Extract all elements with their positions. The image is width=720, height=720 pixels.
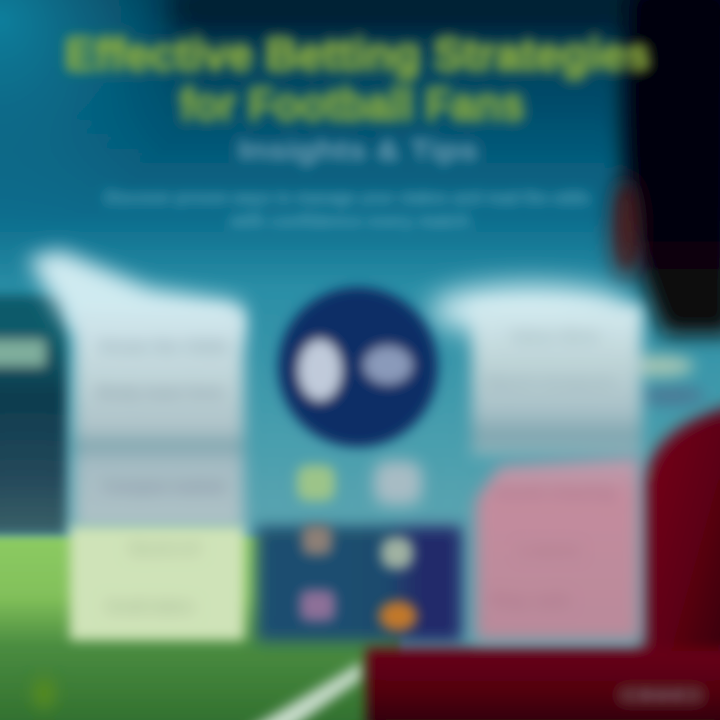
shirt shoulder: [644, 405, 720, 720]
panel: left info card: [74, 310, 244, 528]
right card text: [485, 327, 615, 392]
intro text: with confidence every match: [229, 211, 470, 232]
card text: Know the Odds: [100, 337, 230, 356]
panel: right info card: [472, 305, 642, 455]
green card text: Bankroll: [130, 539, 200, 558]
green card text: Small stakes: [105, 597, 195, 616]
green card text: [105, 539, 200, 616]
panel: right pink card: [476, 456, 640, 640]
pink card text: Avoid chasing: [495, 483, 615, 502]
card text: Study team form: [95, 383, 225, 402]
icon: orange tile: [379, 601, 417, 631]
person: face edge: [612, 178, 640, 278]
pink card text: Limits: [520, 541, 580, 560]
person: glow at neck: [626, 355, 694, 377]
person: red shirt: [366, 405, 720, 720]
icon: grey-green tile: [381, 537, 413, 569]
pink card body: [476, 456, 640, 640]
background: sky glow top left: [0, 0, 225, 235]
icon: green tile: [297, 465, 335, 501]
background: left stadium stand: [0, 295, 67, 535]
pink card text: [490, 483, 615, 610]
title: [65, 28, 651, 130]
panel: left green card: [70, 526, 244, 640]
card text: [95, 337, 230, 496]
panel: navy behind centre icons: [256, 526, 462, 642]
footer mark: [618, 686, 704, 704]
right card text: Value Bets: [510, 327, 600, 346]
background: dark sky band: [170, 0, 630, 30]
footer chip: [618, 686, 704, 704]
title: Effective Betting Strategies: [65, 28, 651, 80]
footer text: Brand: [641, 687, 681, 704]
pink card text: Play safe: [490, 591, 570, 610]
background: clouds left: [28, 250, 240, 340]
person: shadow by shoulder: [638, 386, 706, 406]
icon: small logo bottom left: [32, 677, 56, 709]
background: clouds right: [430, 284, 630, 336]
intro text: [104, 188, 590, 232]
icon: central circle with football symbols: [278, 287, 438, 447]
background: grass: [0, 537, 400, 720]
intro text: Discover proven ways to manage your stakes and read the odds: [104, 188, 590, 209]
title: for Football Fans: [180, 78, 524, 130]
green card body: [70, 526, 244, 640]
icon: grey tile: [374, 461, 422, 505]
icon: brown tile: [302, 525, 332, 555]
right card body: [472, 305, 642, 455]
subtitle: Insights & Tips: [238, 134, 478, 167]
shirt lower bar: [366, 648, 720, 720]
right card text: Match Analysis: [485, 373, 615, 392]
card body: [74, 310, 244, 528]
person: head and hair: [623, 0, 720, 335]
icon: purple tile: [300, 590, 335, 621]
card text: Compare markets: [102, 477, 228, 496]
pitch line: [240, 662, 362, 720]
